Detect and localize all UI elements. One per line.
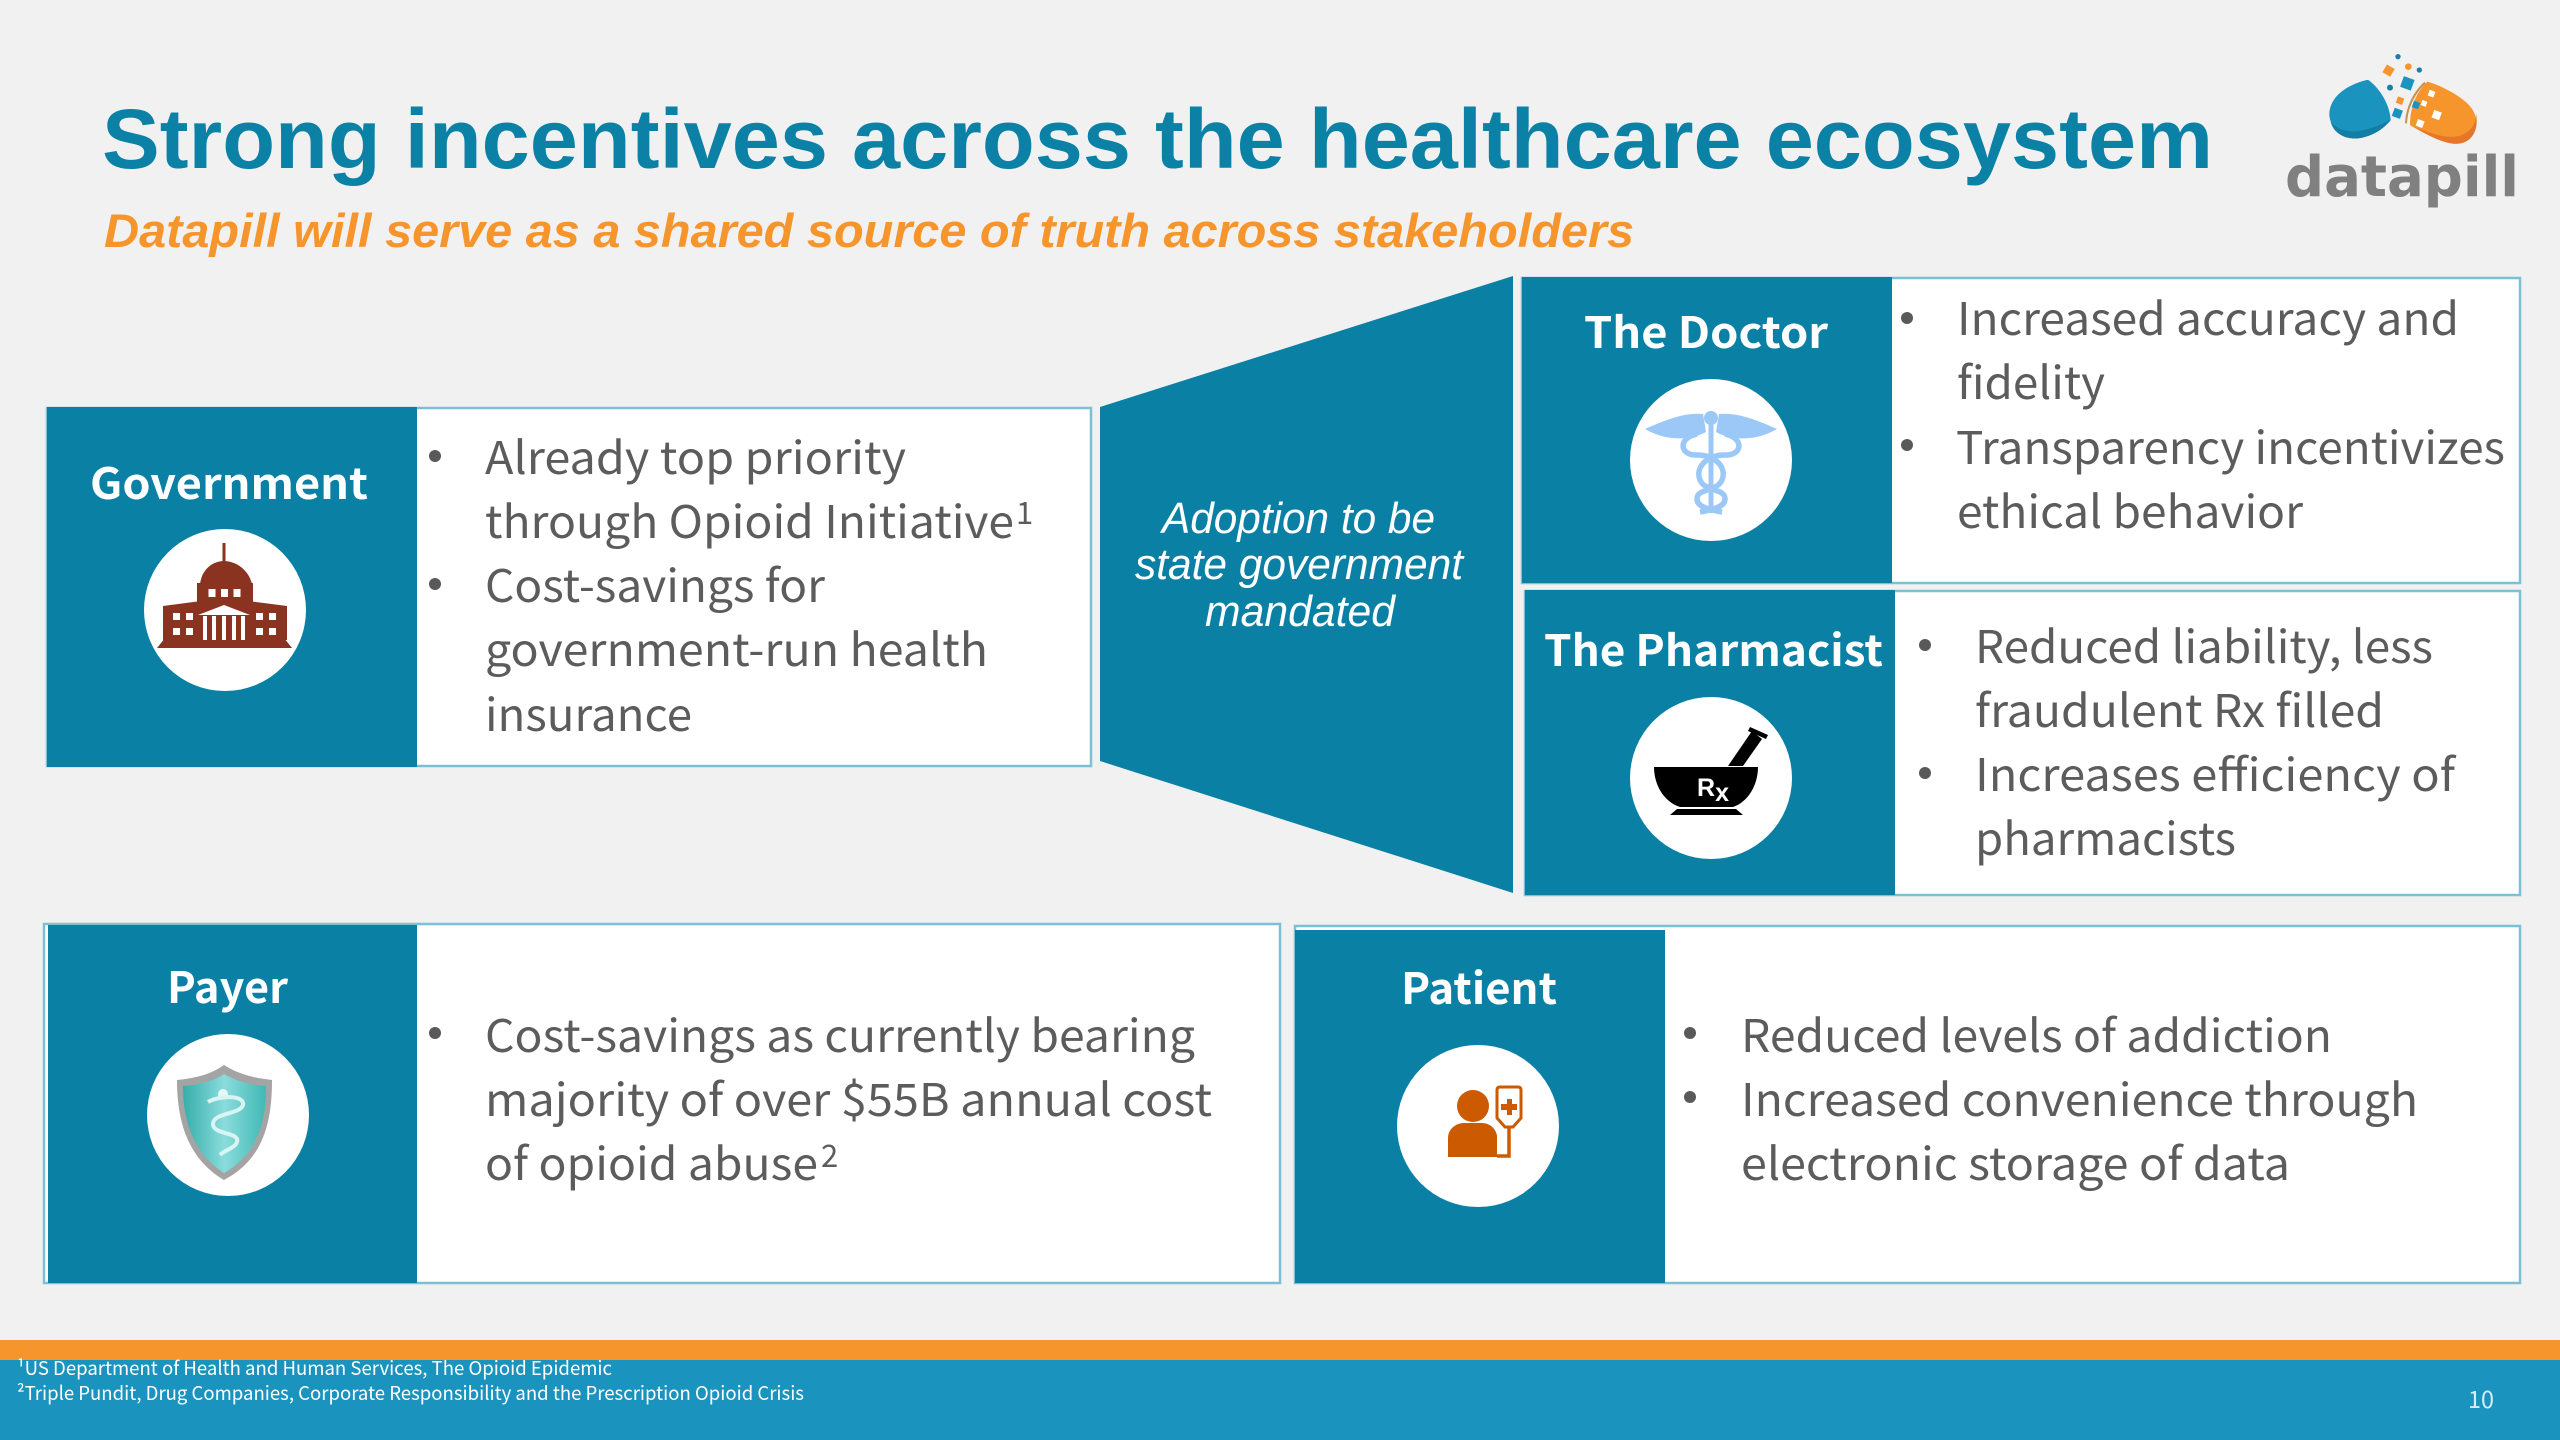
government bullets: Cost-savings for (485, 550, 826, 615)
doctor bullets: Increased accuracy and (1957, 283, 2459, 348)
patient bullets: Increased convenience through (1741, 1064, 2418, 1129)
pharmacist bullets: fraudulent Rx filled (1975, 675, 2384, 740)
government bullets: 1 (1016, 488, 1033, 533)
panel: payer (44, 924, 1280, 1283)
doctor bullets: fidelity (1957, 347, 2105, 412)
icon: mortar and pestle: R (1697, 774, 1715, 802)
icon: opened capsule (2329, 54, 2477, 144)
footer band (0, 1340, 2560, 1440)
title: Strong incentives across the healthcare ecosystem (102, 92, 2213, 186)
government bullets: insurance (485, 679, 692, 744)
government bullets: Already top priority (485, 422, 906, 487)
patient bullets (1684, 1000, 2418, 1193)
icon: government building (144, 529, 306, 691)
logo wordmark: datapill (2285, 145, 2519, 210)
icon: caduceus (1630, 379, 1792, 541)
government bullets (429, 422, 1033, 744)
arrow: funnel from government to doctor and pharmacist (1100, 276, 1513, 893)
panel: government (47, 407, 1091, 767)
payer bullet: 2 (821, 1131, 838, 1176)
logo: datapill (2285, 54, 2519, 210)
heading: Payer: Payer (167, 954, 288, 1016)
funnel text: Adoption to be (1159, 494, 1435, 543)
doctor bullets: ethical behavior (1957, 476, 2304, 541)
doctor bullets: Transparency incentivizes (1956, 412, 2505, 477)
patient bullets: electronic storage of data (1741, 1128, 2290, 1193)
pharmacist bullets: Increases efficiency of (1975, 739, 2457, 804)
heading: Government: Government (90, 450, 368, 512)
icon: shield (147, 1034, 309, 1196)
payer bullet (429, 1000, 1212, 1193)
funnel text: state government (1135, 540, 1465, 589)
heading: Patient: Patient (1401, 955, 1557, 1017)
funnel text: mandated (1205, 587, 1396, 636)
icon: patient with IV bag (1397, 1045, 1559, 1207)
footnotes: ¹US Department of Health and Human Services, The Opioid Epidemic (17, 1354, 612, 1381)
page number: 10 (2468, 1380, 2494, 1415)
payer bullet: Cost-savings as currently bearing (485, 1000, 1195, 1065)
patient bullets: Reduced levels of addiction (1741, 1000, 2332, 1065)
government bullets: government-run health (485, 614, 988, 679)
footnotes (17, 1354, 804, 1406)
pharmacist bullets (1919, 611, 2457, 868)
icon: mortar and pestle: x (1715, 779, 1729, 807)
heading: The Pharmacist: The Pharmacist (1544, 617, 1883, 679)
heading: The Doctor: The Doctor (1584, 299, 1828, 361)
payer bullet: majority of over $55B annual cost (485, 1064, 1212, 1129)
doctor bullets (1901, 283, 2505, 541)
panel: the doctor (1522, 277, 2520, 583)
pharmacist bullets: pharmacists (1975, 803, 2236, 868)
panel: the pharmacist (1525, 590, 2520, 895)
icon: mortar and pestle (1630, 697, 1792, 859)
payer bullet: of opioid abuse (485, 1128, 818, 1193)
funnel text (1135, 494, 1465, 636)
footnotes: ²Triple Pundit, Drug Companies, Corporate Responsibility and the Prescription Opioid Crisis (17, 1379, 804, 1406)
subtitle: Datapill will serve as a shared source of truth across stakeholders (104, 204, 1634, 257)
panel: patient (1295, 926, 2520, 1283)
government bullets: through Opioid Initiative (485, 486, 1014, 551)
pharmacist bullets: Reduced liability, less (1975, 611, 2433, 676)
